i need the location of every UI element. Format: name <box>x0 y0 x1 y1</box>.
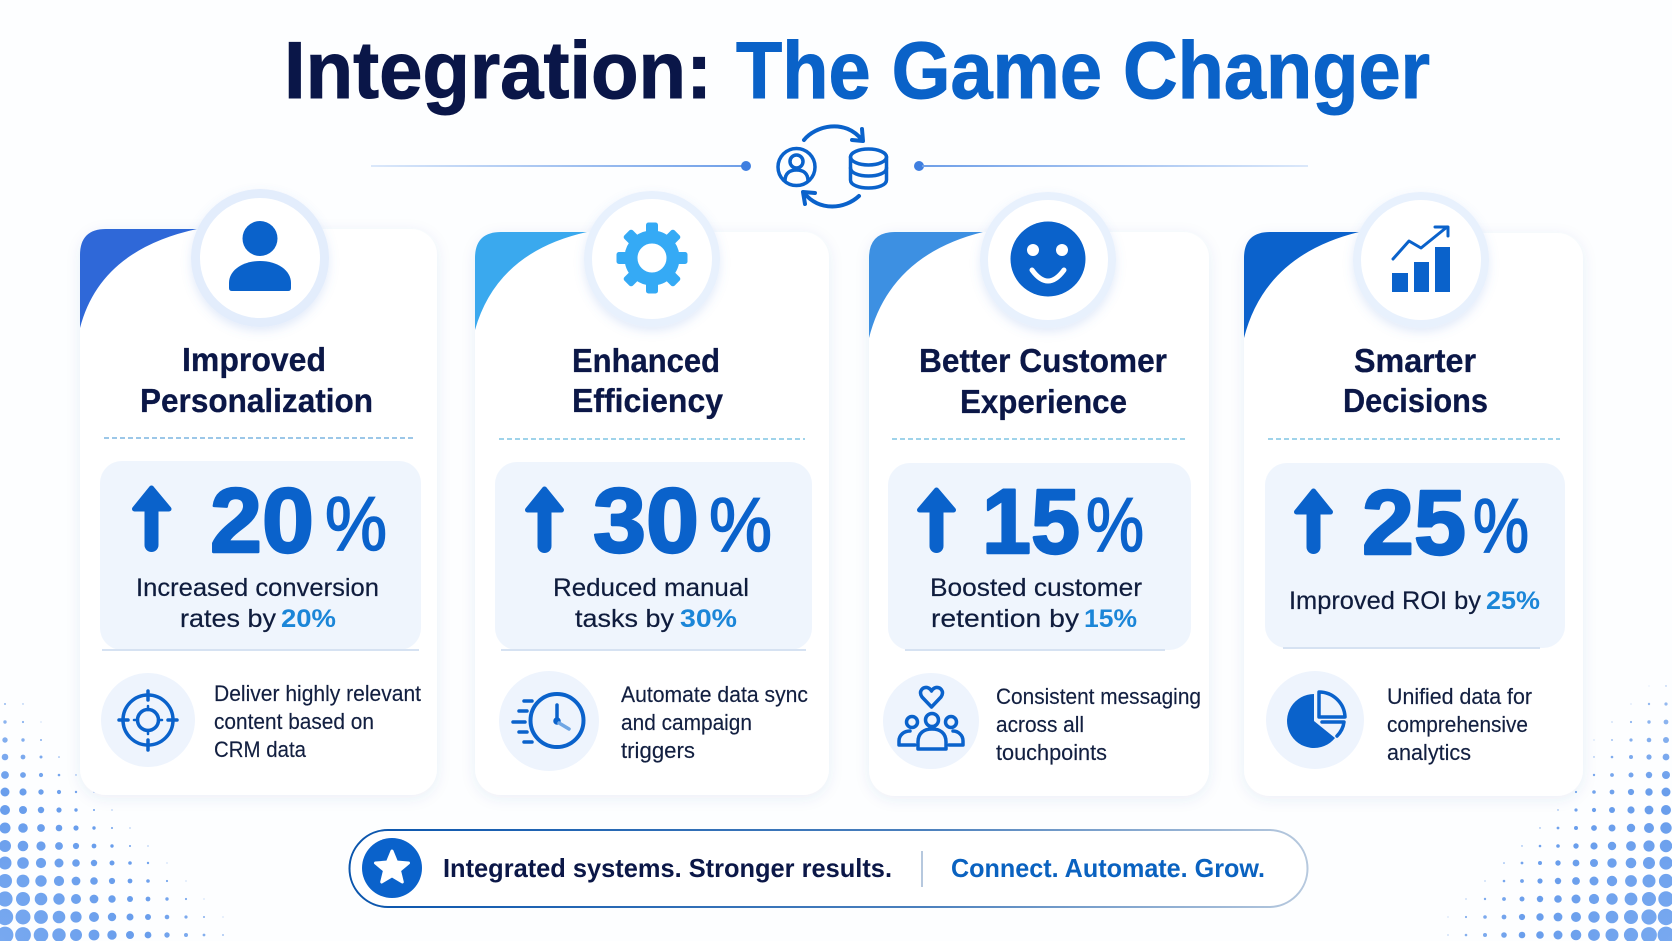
icon: up arrow <box>1296 491 1330 547</box>
icon: up arrow <box>528 489 562 546</box>
heading: Smarter <box>1354 342 1476 379</box>
corner accent <box>869 232 983 338</box>
icon: up arrow <box>134 488 169 545</box>
panel: smarter decisions <box>1244 192 1583 796</box>
divider with sync icon <box>371 126 1308 206</box>
corner accent <box>1244 232 1359 338</box>
heading: Better Customer <box>919 342 1167 379</box>
icon: up arrow <box>920 490 954 546</box>
heading <box>1343 342 1488 419</box>
stat value <box>982 471 1144 573</box>
heading: Enhanced <box>572 342 720 379</box>
stat description <box>553 574 749 633</box>
detail text: CRM data <box>214 737 307 762</box>
icon: star badge <box>362 838 422 898</box>
icon: people with heart <box>883 673 979 769</box>
stat value: % <box>325 482 387 567</box>
halftone dots bottom right <box>1447 685 1672 941</box>
detail text: touchpoints <box>996 740 1107 765</box>
title <box>284 26 1430 116</box>
stat description: rates by <box>180 605 277 633</box>
icon: clock <box>499 671 599 771</box>
stat description: Boosted customer <box>930 574 1142 602</box>
detail text: Deliver highly relevant <box>214 681 421 706</box>
corner accent <box>80 229 197 328</box>
stat value <box>1362 472 1529 574</box>
panel: better customer experience <box>869 192 1209 796</box>
detail text: content based on <box>214 709 374 734</box>
stat description: retention by <box>931 605 1080 633</box>
heading: Experience <box>960 383 1127 420</box>
detail text <box>621 682 808 763</box>
icon: pie chart <box>1266 671 1364 769</box>
stat value: % <box>1086 483 1144 568</box>
detail text: analytics <box>1387 740 1471 765</box>
icon: sync arrows <box>803 126 863 206</box>
tagline text: Integrated systems. Stronger results. <box>443 853 892 883</box>
detail text: triggers <box>621 738 695 763</box>
stat description: Improved ROI by <box>1289 587 1482 615</box>
heading: Improved <box>182 341 326 378</box>
stat value <box>210 470 387 572</box>
stat description: Increased conversion <box>136 574 379 602</box>
stat value: 15 <box>982 471 1080 573</box>
halftone dots bottom left <box>0 703 224 941</box>
panel: enhanced efficiency <box>475 191 829 795</box>
icon: growth chart <box>1353 192 1489 328</box>
stat description: 30% <box>680 605 737 633</box>
stat description: Reduced manual <box>553 574 749 602</box>
detail text <box>996 684 1201 765</box>
stat description: 25% <box>1486 587 1540 615</box>
panel: improved personalization <box>80 189 437 795</box>
detail text: Automate data sync <box>621 682 808 707</box>
stat value: 25 <box>1362 472 1466 574</box>
stat panel <box>1265 463 1565 648</box>
stat value: % <box>1473 484 1529 569</box>
stat description: tasks by <box>575 605 675 633</box>
title: Integration: <box>284 26 712 116</box>
icon: gear <box>584 191 720 327</box>
icon: person in circle <box>778 148 815 186</box>
stat description <box>136 574 379 633</box>
detail text <box>1387 684 1532 765</box>
callout: bottom tagline <box>350 830 1308 907</box>
heading <box>919 342 1167 420</box>
stat panel <box>495 462 812 650</box>
stat panel <box>888 463 1191 650</box>
detail text: Unified data for <box>1387 684 1532 709</box>
detail text: comprehensive <box>1387 712 1528 737</box>
stat description <box>930 574 1142 633</box>
heading: Efficiency <box>572 382 724 419</box>
stat value: 20 <box>210 470 314 572</box>
icon: smile <box>980 192 1116 328</box>
heading: Decisions <box>1343 382 1488 419</box>
heading: Personalization <box>140 382 373 419</box>
icon: person <box>191 189 329 327</box>
stat panel <box>100 461 421 650</box>
corner accent <box>475 232 587 330</box>
stat description: 20% <box>281 605 336 633</box>
icon: target <box>101 673 195 767</box>
call to action text: Connect. Automate. Grow. <box>951 853 1265 883</box>
stat description: 15% <box>1084 605 1137 633</box>
icon: database <box>850 149 886 188</box>
title: The Game Changer <box>736 26 1430 116</box>
detail text: Consistent messaging <box>996 684 1201 709</box>
detail text <box>214 681 421 762</box>
detail text: across all <box>996 712 1084 737</box>
heading <box>572 342 724 419</box>
stat value <box>593 470 772 572</box>
stat value: 30 <box>593 470 699 572</box>
stat value: % <box>709 483 772 568</box>
heading <box>140 341 373 419</box>
detail text: and campaign <box>621 710 752 735</box>
